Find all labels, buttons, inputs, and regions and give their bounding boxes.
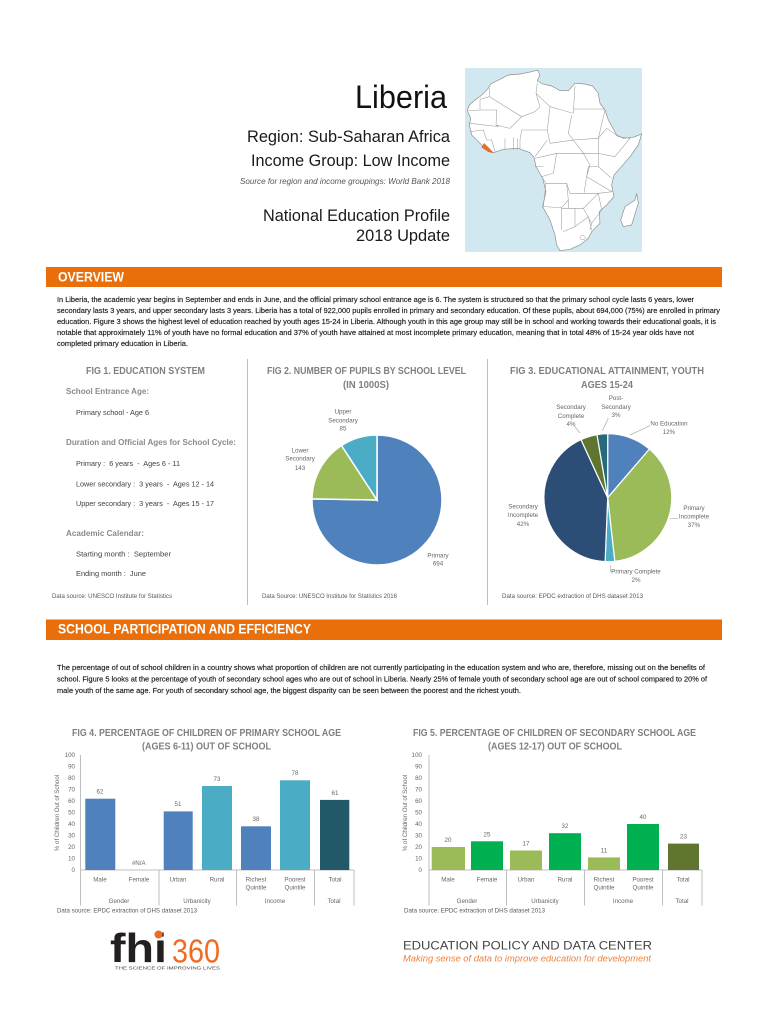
category labels: Total	[676, 876, 690, 884]
pie labels	[508, 395, 710, 584]
value labels: 11	[601, 848, 608, 854]
y axis: 20	[68, 844, 76, 851]
academic calendar: Ending month : June	[76, 569, 146, 578]
category labels: Richest	[246, 876, 267, 884]
y axis: 10	[68, 856, 76, 862]
y axis: 40	[415, 821, 423, 828]
participation text block: school. Figure 5 looks at the percentage of youth of secondary school ages who are out of school in Liberia. Nearly 25% of female youth of secondary school age are out of school compared to 20% of	[57, 674, 708, 684]
pie labels: 3%	[612, 412, 621, 419]
y axis: 90	[68, 764, 76, 770]
pie labels: 42%	[517, 521, 530, 528]
update year: 2018 Update	[356, 226, 450, 245]
y axis	[54, 752, 354, 906]
category labels	[93, 876, 342, 905]
pie labels: Post-	[609, 395, 623, 402]
value labels: 78	[292, 770, 299, 777]
pie labels: Secondary	[601, 404, 632, 411]
value labels: 62	[97, 788, 104, 796]
value labels: #N/A	[132, 860, 146, 867]
category labels: Total	[327, 898, 341, 905]
category labels	[441, 876, 690, 905]
fig 3 heading: FIG 3. EDUCATIONAL ATTAINMENT, YOUTH	[510, 366, 704, 377]
logo: education policy and data center: EDUCATION POLICY AND DATA CENTER	[403, 940, 652, 952]
duration and official ages: Duration and Official Ages for School Cycle:	[66, 437, 236, 447]
section banner: overview: OVERVIEW	[58, 270, 124, 284]
pie labels: Lower	[292, 448, 308, 454]
category labels: Male	[93, 876, 107, 884]
pie labels: Secondary	[328, 418, 359, 424]
y axis: 100	[412, 752, 423, 759]
category labels: Rural	[210, 876, 224, 884]
category labels: Male	[441, 876, 455, 884]
duration and official ages: Lower secondary : 3 years - Ages 12 - 14	[76, 480, 214, 488]
fig 3 heading	[510, 366, 704, 391]
academic calendar	[66, 528, 171, 578]
overview text block: In Liberia, the academic year begins in September and ends in June, and the official primary school entrance age is 6. The system is structured so that the primary school cycle lasts 6 years, lower	[57, 295, 695, 304]
y axis: 80	[415, 775, 423, 782]
academic calendar: Starting month : September	[76, 550, 171, 558]
pie labels: No Education	[650, 420, 688, 428]
section banner: school participation and efficiency	[46, 620, 722, 640]
value labels: 61	[332, 790, 339, 797]
fig 5 heading: (AGES 12-17) OUT OF SCHOOL	[488, 742, 622, 752]
academic calendar: Academic Calendar:	[66, 528, 144, 538]
income group: Income Group: Low Income	[251, 151, 450, 170]
y axis: 40	[68, 821, 76, 828]
value labels: 38	[253, 816, 260, 823]
logo: fhi360: 360	[172, 932, 220, 970]
y axis: 30	[68, 832, 76, 840]
profile name: National Education Profile	[263, 206, 450, 225]
category labels: Quintile	[594, 884, 615, 892]
overview text block: notable that approximately 11% of youth have no formal education and 37% of youth have attained at most incomplete primary education, meaning that in total 48% of 15-24 year olds have not	[57, 328, 694, 337]
section banner: school participation and efficiency: SCHOOL PARTICIPATION AND EFFICIENCY	[58, 622, 311, 636]
y axis: % of Children Out of School	[54, 775, 61, 851]
y axis: 90	[415, 764, 423, 770]
pie labels: 37%	[688, 522, 701, 529]
pie labels: Primary	[427, 552, 450, 560]
y axis: 70	[68, 786, 76, 794]
region: Region: Sub-Saharan Africa	[247, 127, 451, 146]
category labels: Gender	[109, 898, 129, 905]
value labels: 51	[175, 801, 182, 808]
fig 4 data source: Data source: EPDC extraction of DHS dataset 2013	[57, 908, 198, 914]
pie labels: 2%	[632, 577, 641, 584]
value labels: 17	[523, 840, 530, 848]
logo: education policy and data center: Making sense of data to improve education for development	[403, 954, 651, 964]
y axis: 70	[415, 786, 423, 794]
fig 5 data source: Data source: EPDC extraction of DHS dataset 2013	[404, 908, 546, 914]
logo: fhi360: THE SCIENCE OF IMPROVING LIVES	[115, 966, 220, 970]
duration and official ages: Primary : 6 years - Ages 6 - 11	[76, 459, 180, 468]
category labels: Urbanicity	[531, 898, 560, 905]
panel: fig 5 secondary out of school bar chart	[402, 728, 702, 914]
value labels: 25	[484, 832, 491, 838]
pie labels: Incomplete	[508, 512, 539, 519]
y axis: 0	[72, 867, 76, 874]
fig 2 heading: FIG 2. NUMBER OF PUPILS BY SCHOOL LEVEL	[267, 366, 466, 377]
category labels: Female	[129, 876, 150, 884]
fig 1 heading: FIG 1. EDUCATION SYSTEM	[86, 366, 205, 377]
pie labels: Incomplete	[679, 514, 710, 520]
overview text block: completed primary education in Liberia.	[57, 339, 188, 348]
pie labels: Secondary	[556, 404, 587, 411]
logo: education policy and data center	[403, 940, 652, 964]
category labels: Richest	[594, 876, 615, 884]
y axis: 100	[65, 752, 76, 759]
pie labels: Primary	[683, 505, 706, 512]
pie labels: Secondary	[508, 504, 539, 510]
y axis: 60	[68, 798, 76, 805]
pie labels: Primary Complete	[611, 568, 661, 576]
value labels: 20	[445, 837, 452, 844]
fig 3 data source: Data source: EPDC extraction of DHS dataset 2013	[502, 593, 644, 600]
y axis: 80	[68, 775, 76, 782]
fig 4 heading: FIG 4. PERCENTAGE OF CHILDREN OF PRIMARY SCHOOL AGE	[72, 728, 341, 739]
logo: fhi360	[110, 925, 220, 971]
pie labels: 85	[340, 426, 347, 432]
category labels: Quintile	[246, 884, 267, 892]
fig 2 data source: Data Source: UNESCO Institute for Statistics 2016	[262, 593, 398, 600]
category labels: Total	[675, 898, 689, 905]
fig 4 heading	[72, 728, 341, 752]
participation text block	[57, 663, 708, 695]
fig 3 heading: AGES 15-24	[581, 380, 633, 391]
pie labels: 4%	[567, 421, 576, 428]
pie labels: Secondary	[285, 456, 316, 462]
y axis: 60	[415, 798, 423, 805]
category labels: Gender	[457, 898, 477, 905]
value labels: 40	[640, 814, 647, 821]
panel: fig 4 primary out of school bar chart	[54, 728, 354, 914]
category labels: Total	[328, 876, 342, 884]
duration and official ages	[66, 437, 236, 508]
pie labels: Upper	[335, 408, 351, 416]
pie labels: Complete	[558, 413, 585, 420]
category labels: Poorest	[284, 876, 306, 884]
bars	[432, 824, 699, 870]
value labels: 23	[680, 834, 687, 840]
category labels: Rural	[558, 876, 572, 884]
school entrance age: School Entrance Age:	[66, 386, 149, 396]
duration and official ages: Upper secondary : 3 years - Ages 15 - 17	[76, 499, 214, 508]
bars	[85, 780, 349, 870]
panel: fig 3 educational attainment pie	[502, 366, 710, 600]
pie labels: 694	[433, 560, 444, 568]
school entrance age	[66, 386, 149, 417]
map of Africa with Liberia highlighted	[465, 68, 642, 252]
category labels: Quintile	[633, 884, 654, 892]
category labels: Urbanicity	[183, 898, 212, 905]
title: Liberia	[355, 79, 447, 115]
category labels: Income	[265, 898, 286, 905]
fig 4 heading: (AGES 6-11) OUT OF SCHOOL	[142, 742, 271, 752]
y axis: 20	[415, 844, 423, 851]
y axis: 0	[419, 867, 423, 874]
y axis: 50	[68, 810, 76, 816]
fig 1 data source: Data source: UNESCO Institute for Statistics	[52, 593, 172, 600]
y axis: 30	[415, 832, 423, 840]
category labels: Poorest	[632, 876, 654, 884]
value labels: 73	[214, 776, 221, 783]
participation text block: male youth of the same age. For youth of secondary school age, the biggest disparity can be seen between the poorest and the richest youth.	[57, 686, 521, 695]
pie labels: 12%	[663, 429, 676, 436]
school entrance age: Primary school - Age 6	[76, 408, 149, 417]
value labels: 32	[562, 823, 569, 830]
y axis	[402, 752, 702, 906]
value labels	[97, 770, 339, 867]
logo: fhi360: fhi	[110, 925, 167, 971]
value labels	[445, 814, 687, 854]
y axis: % of Children Out of School	[402, 775, 409, 851]
fig 5 heading	[413, 728, 696, 752]
overview text block	[57, 295, 720, 348]
category labels: Quintile	[285, 884, 306, 892]
pie labels	[285, 408, 450, 568]
section banner: overview	[46, 267, 722, 287]
participation text block: The percentage of out of school children in a country shows what proportion of children are not currently participating in the education system and who are, therefore, missing out on the benefits of	[57, 663, 706, 672]
category labels: Urban	[170, 876, 187, 884]
category labels: Urban	[518, 876, 535, 884]
header: country title block	[240, 79, 451, 245]
fig 2 heading: (IN 1000S)	[343, 380, 389, 391]
fig 2 heading	[267, 366, 466, 391]
category labels: Income	[613, 898, 634, 905]
pie chart	[312, 435, 442, 565]
category labels: Female	[477, 876, 498, 884]
overview text block: education. Figure 3 shows the highest level of education reached by youth ages 15-24 in Liberia. Although youth in this age group may still be in school and working towards their educational goals, it is	[57, 317, 716, 326]
pie labels: 143	[295, 465, 306, 472]
panel: fig 1 education system	[52, 366, 236, 600]
source note: Source for region and income groupings: World Bank 2018	[240, 176, 450, 186]
pie chart	[544, 434, 672, 562]
leader lines	[574, 418, 678, 572]
fig 5 heading: FIG 5. PERCENTAGE OF CHILDREN OF SECONDARY SCHOOL AGE	[413, 728, 696, 739]
overview text block: secondary lasts 3 years, and upper secondary lasts 3 years. Liberia has a total of 922,000 pupils enrolled in primary and secondary education. Of these pupils, about 694,000 (75%) are enrolled in primary	[57, 306, 720, 315]
y axis: 10	[415, 856, 423, 862]
panel: fig 2 number of pupils pie	[262, 366, 466, 600]
y axis: 50	[415, 810, 423, 816]
